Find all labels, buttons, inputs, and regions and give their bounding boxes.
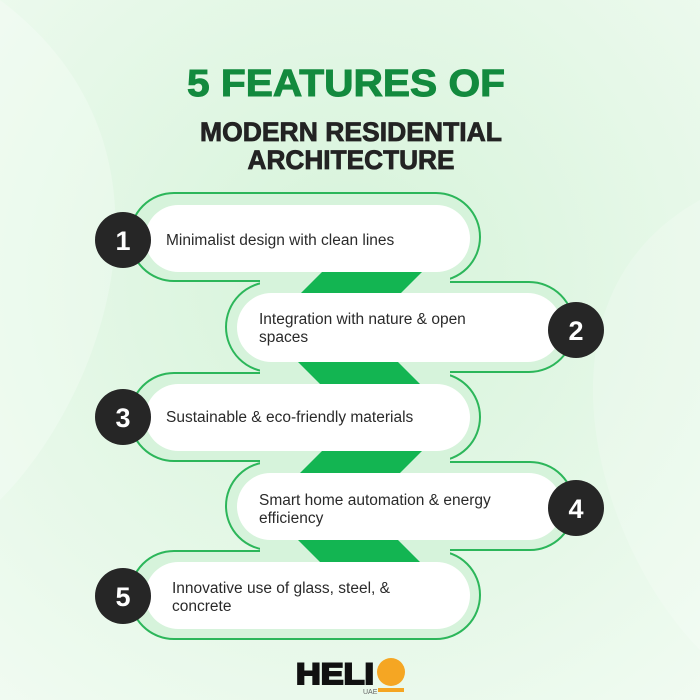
item 2	[237, 293, 604, 362]
item 3: 3	[115, 403, 131, 433]
logo: HELI	[296, 658, 374, 691]
item 4: Smart home automation & energy	[259, 492, 491, 509]
logo	[296, 658, 405, 696]
item 1: 1	[115, 226, 131, 256]
item 3: Sustainable & eco-friendly materials	[166, 409, 414, 426]
connectors: green parallelograms	[298, 272, 422, 562]
item 5: concrete	[172, 598, 231, 615]
item 4	[237, 473, 604, 540]
item 2: Integration with nature & open	[259, 311, 466, 328]
title	[187, 63, 505, 175]
item 2: 2	[568, 316, 584, 346]
item 4: efficiency	[259, 510, 324, 527]
title: MODERN RESIDENTIAL	[200, 117, 502, 147]
logo: UAE	[363, 689, 378, 696]
item 3	[95, 384, 470, 451]
item 4: 4	[568, 494, 584, 524]
item 1: Minimalist design with clean lines	[166, 232, 395, 249]
item 5: 5	[115, 582, 131, 612]
item 2: spaces	[259, 329, 308, 346]
title: ARCHITECTURE	[248, 145, 454, 175]
item 5: Innovative use of glass, steel, &	[172, 580, 391, 597]
title: 5 FEATURES OF	[187, 63, 505, 105]
item 1	[95, 205, 470, 272]
item 5	[95, 562, 470, 629]
connector outlines	[130, 193, 574, 639]
